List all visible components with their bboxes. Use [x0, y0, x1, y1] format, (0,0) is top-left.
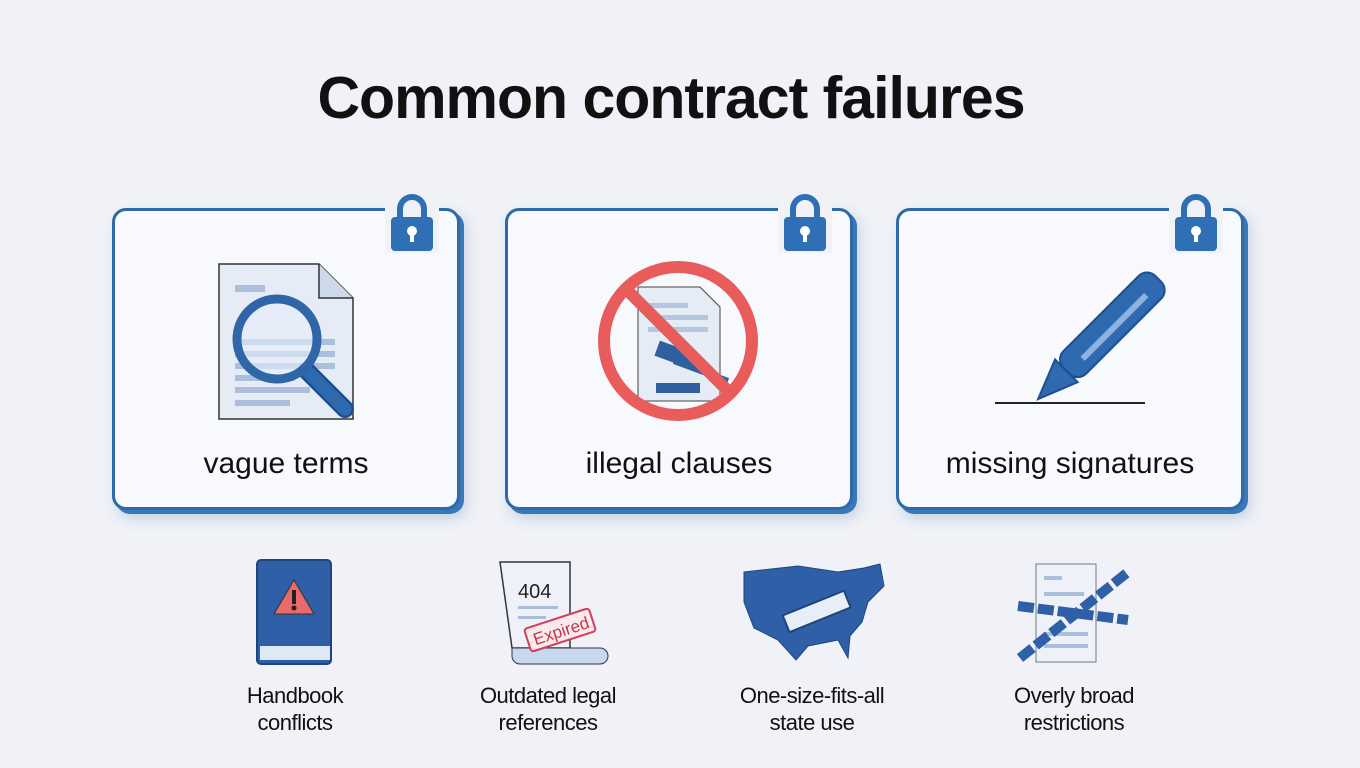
icon: US map	[744, 563, 884, 661]
icon: document with magnifier	[218, 263, 354, 420]
text: outdated legal references	[480, 683, 616, 735]
icon: chained document	[1016, 564, 1130, 662]
text: one-size-fits-all: state use	[770, 710, 854, 735]
text: handbook conflicts: Handbook	[247, 683, 343, 708]
icon: expired scroll: Expired	[531, 613, 592, 649]
icon: prohibited gavel	[598, 261, 758, 421]
text: one-size-fits-all: One-size-fits-all	[740, 683, 884, 708]
icon: expired scroll: 404	[518, 581, 551, 603]
title: Common contract failures	[317, 65, 1025, 131]
icon: lock	[1169, 191, 1223, 253]
text: handbook conflicts	[247, 683, 344, 735]
panel: vague terms: vague terms	[203, 447, 369, 480]
panel: vague terms	[112, 208, 460, 510]
icon: lock	[385, 191, 439, 253]
text: handbook conflicts: conflicts	[258, 710, 332, 735]
icon: pen	[995, 272, 1166, 404]
text: outdated legal references: Outdated legal	[480, 683, 616, 708]
icon: expired scroll	[499, 561, 608, 664]
text: overly broad restrictions: restrictions	[1024, 710, 1124, 735]
panel: missing signatures	[896, 208, 1244, 510]
text: overly broad restrictions: Overly broad	[1014, 683, 1134, 708]
panel: illegal clauses: illegal clauses	[586, 447, 772, 480]
icon: handbook	[256, 559, 332, 665]
text: one-size-fits-all	[740, 683, 884, 735]
text: outdated legal references: references	[499, 710, 597, 735]
text: overly broad restrictions	[1014, 683, 1134, 735]
panel: missing signatures: missing signatures	[946, 447, 1194, 480]
panel: illegal clauses	[505, 208, 853, 510]
icon: lock	[778, 191, 832, 253]
